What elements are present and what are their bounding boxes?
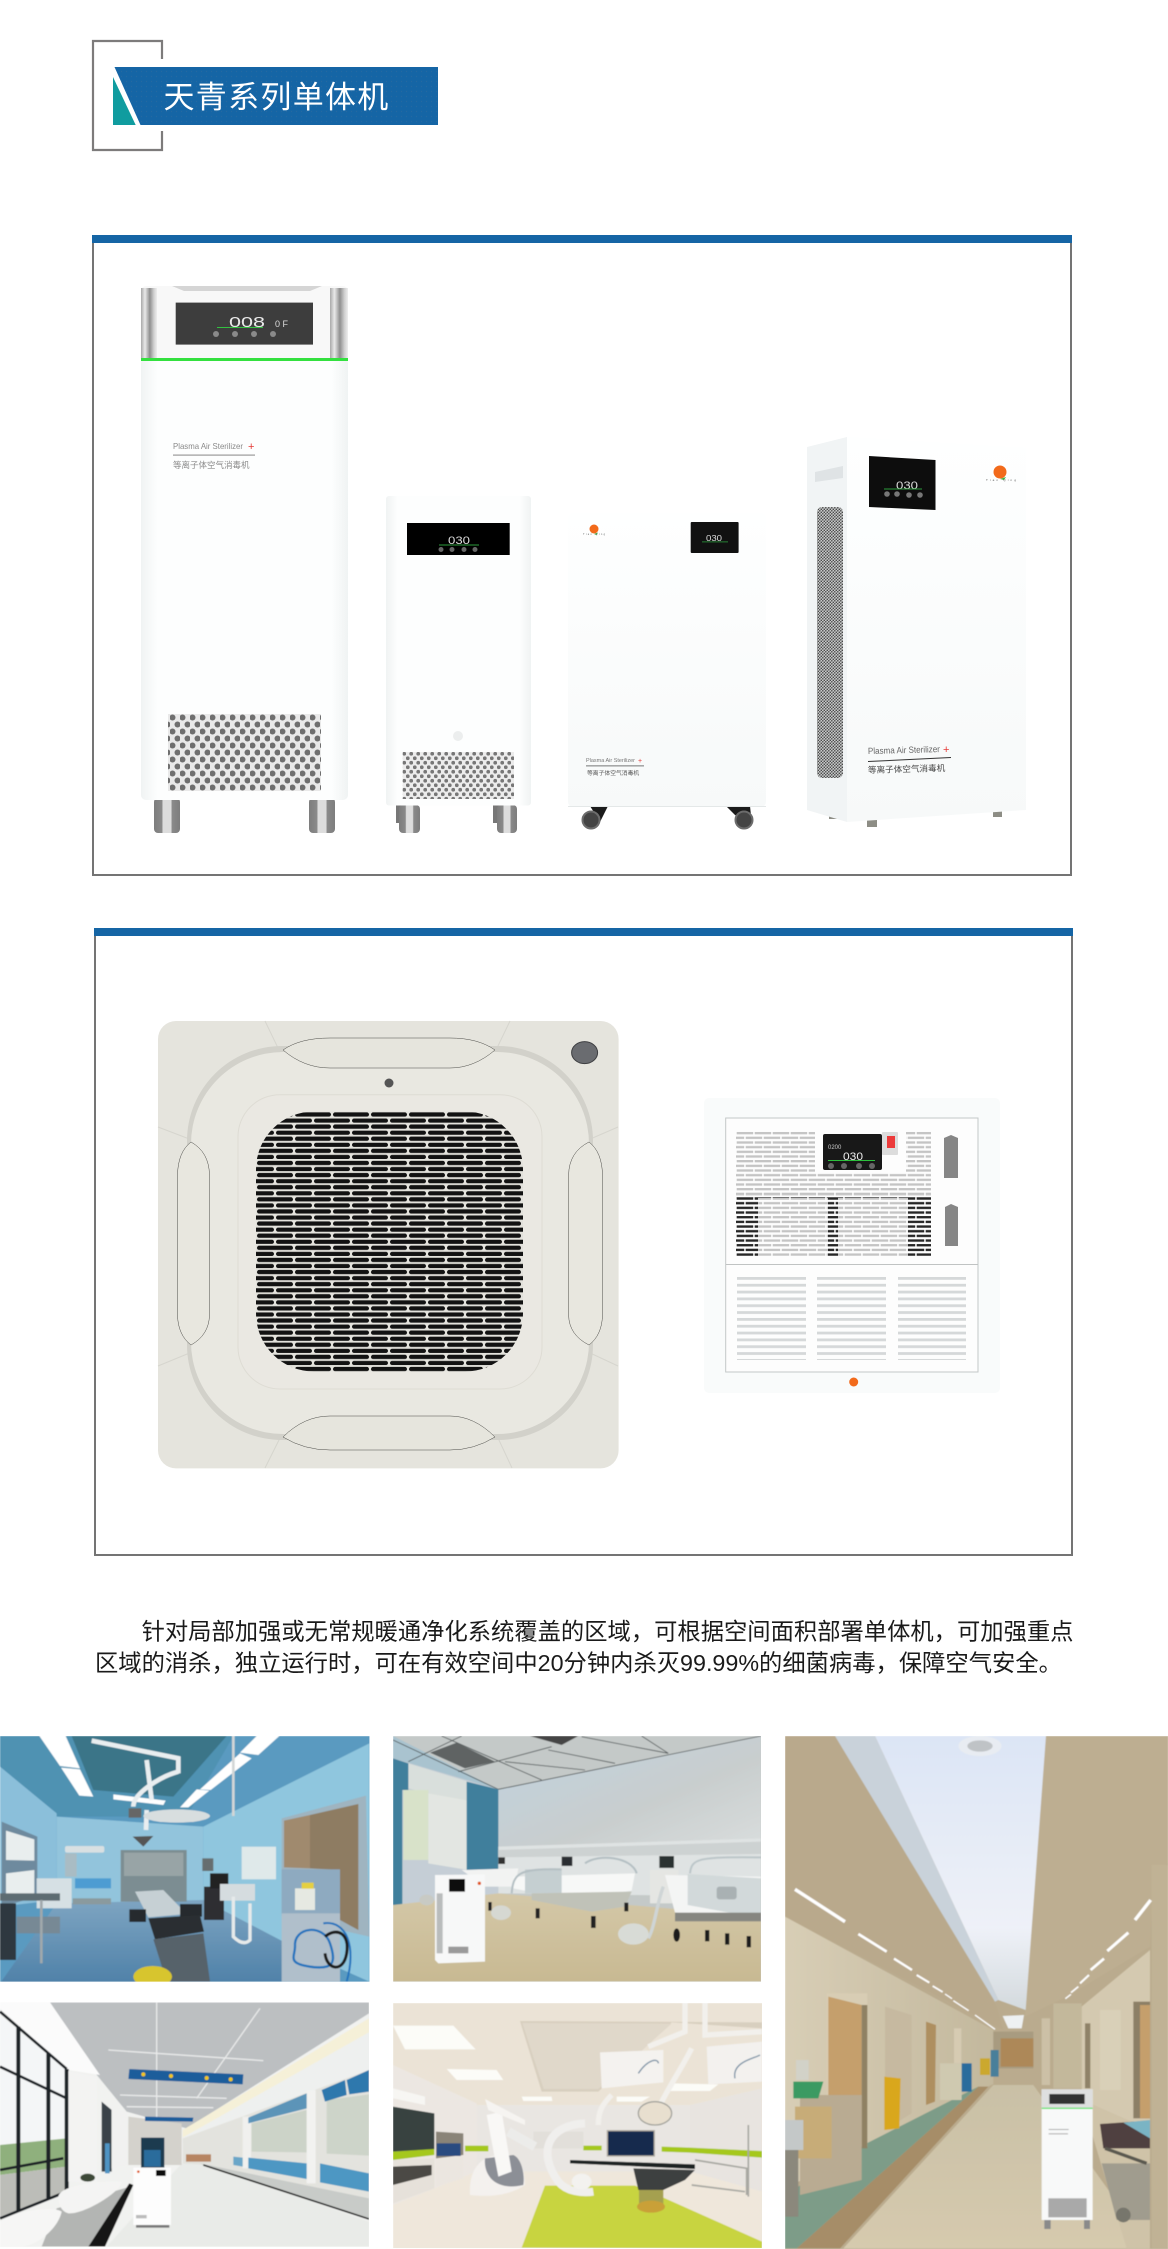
unit 4: angled sterilizer with side grille: 030 [896,480,918,492]
unit 3: wide sterilizer on casters: 等离子体空气消毒机 [587,769,639,777]
unit 1: tall chrome-top sterilizer: 等离子体空气消毒机 [173,460,250,470]
right vane [569,1142,602,1345]
photo: hospital service hall with sterilizer [0,2002,370,2249]
unit 6: wall-mounted unit [704,1098,1000,1393]
unit 3: wide sterilizer on casters: 030 [706,534,723,543]
unit 3: wide sterilizer on casters: + [638,758,642,765]
unit 4: angled sterilizer with side grille: + [943,744,949,756]
description paragraph: 区域的消杀，独立运行时，可在有效空间中20分钟内杀灭99.99%的细菌病毒，保障空气安全。 [95,1650,1062,1676]
dark grille areas [736,1195,931,1257]
photo: long hospital corridor with sterilizer [785,1736,1168,2249]
unit 4: angled sterilizer with side grille [807,437,1026,827]
unit 6: wall-mounted unit: 0200 [828,1145,842,1151]
panel: ceiling and wall units [94,928,1073,1555]
left vane [178,1142,210,1345]
bottom vane [283,1416,495,1450]
unit 4: angled sterilizer with side grille: Plasma Air Sterilizer [868,744,940,756]
unit 3: wide sterilizer on casters: Tian Qing [583,533,606,536]
photo: hospital ward with sterilizer [393,1736,763,1983]
unit 2: small sterilizer: 030 [448,535,470,547]
air slots [256,1112,523,1372]
unit 1: tall chrome-top sterilizer [141,286,348,833]
photo: operating room [0,1736,370,1987]
unit 1: tall chrome-top sterilizer: 008 [229,314,265,331]
sensor [572,1042,598,1064]
photo: hybrid operating theatre [393,2003,763,2249]
unit 1: tall chrome-top sterilizer: Plasma Air Sterilizer [173,441,243,451]
unit 6: wall-mounted unit: 030 [843,1151,863,1163]
title: 天青系列单体机 [164,80,390,115]
description paragraph [95,1618,1073,1676]
banner corner accent [113,67,140,125]
cassette diagonal seams [158,1021,618,1468]
unit 2: small sterilizer [386,496,531,833]
top vane [283,1038,495,1068]
title banner [113,67,438,125]
unit 1: tall chrome-top sterilizer: 0 F [275,319,289,329]
unit 3: wide sterilizer on casters: Plasma Air Sterilizer [586,758,635,764]
unit 4: angled sterilizer with side grille: 等离子体空气消毒机 [868,762,946,775]
unit 5: ceiling cassette [158,1021,619,1468]
description paragraph: 针对局部加强或无常规暖通净化系统覆盖的区域，可根据空间面积部署单体机，可加强重点 [142,1618,1073,1644]
panel: free-standing units [92,235,1072,875]
logo [384,1078,394,1088]
unit 3: wide sterilizer on casters [568,513,766,828]
bracket frame [93,41,162,150]
unit 4: angled sterilizer with side grille: Tian Qing [986,478,1016,482]
section heading: bracket and title banner [93,41,438,150]
unit 1: tall chrome-top sterilizer: + [248,441,254,453]
